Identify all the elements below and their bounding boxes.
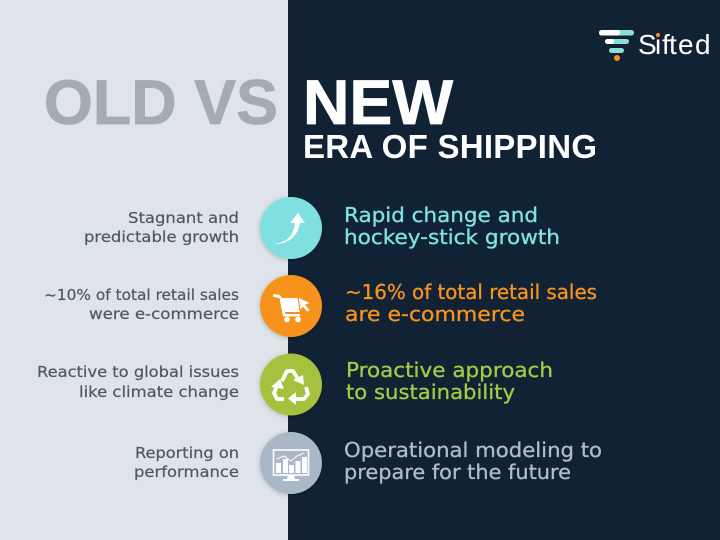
text: new growth: hockey-stick growth [344, 225, 560, 249]
text: old growth: Stagnant and [128, 209, 239, 227]
text: new modeling: Operational modeling to [344, 438, 602, 462]
icon: monitor chart [260, 432, 322, 494]
text: old sustainability: Reactive to global issues [37, 363, 239, 381]
panel: old era background [0, 0, 288, 540]
logo: Sifted: Sifted [638, 29, 711, 60]
subtitle: era of shipping: ERA OF SHIPPING [303, 128, 597, 165]
title: new: NEW [303, 68, 454, 138]
text: new growth [344, 203, 560, 249]
text: new sustainability: to sustainability [346, 380, 515, 404]
text: new e-commerce share: are e-commerce [345, 302, 525, 326]
text: old sustainability [37, 363, 239, 401]
text: new growth: Rapid change and [344, 203, 538, 227]
text: old growth: predictable growth [84, 228, 239, 246]
text: old e-commerce share: ~10% of total retail sales [44, 286, 239, 304]
text: new e-commerce share [345, 280, 597, 326]
text: old e-commerce share: were e-commerce [89, 305, 239, 323]
text: new sustainability [346, 358, 553, 404]
text: old growth [84, 209, 239, 246]
text: new e-commerce share: ~16% of total retail sales [345, 280, 597, 304]
icon: recycle [260, 354, 322, 416]
text: old reporting: Reporting on [135, 444, 239, 462]
title: old vs: OLD VS [44, 68, 278, 138]
icon: shopping cart [260, 275, 322, 337]
text: new sustainability: Proactive approach [346, 358, 553, 382]
text: old e-commerce share [44, 286, 239, 323]
icon: growth arrow [260, 197, 322, 259]
text: old reporting: performance [134, 463, 239, 481]
panel: new era background [288, 0, 720, 540]
text: new modeling [344, 438, 602, 484]
text: old sustainability: like climate change [79, 383, 239, 401]
logo: Sifted [599, 29, 711, 61]
text: old reporting [134, 444, 239, 481]
text: new modeling: prepare for the future [344, 460, 571, 484]
